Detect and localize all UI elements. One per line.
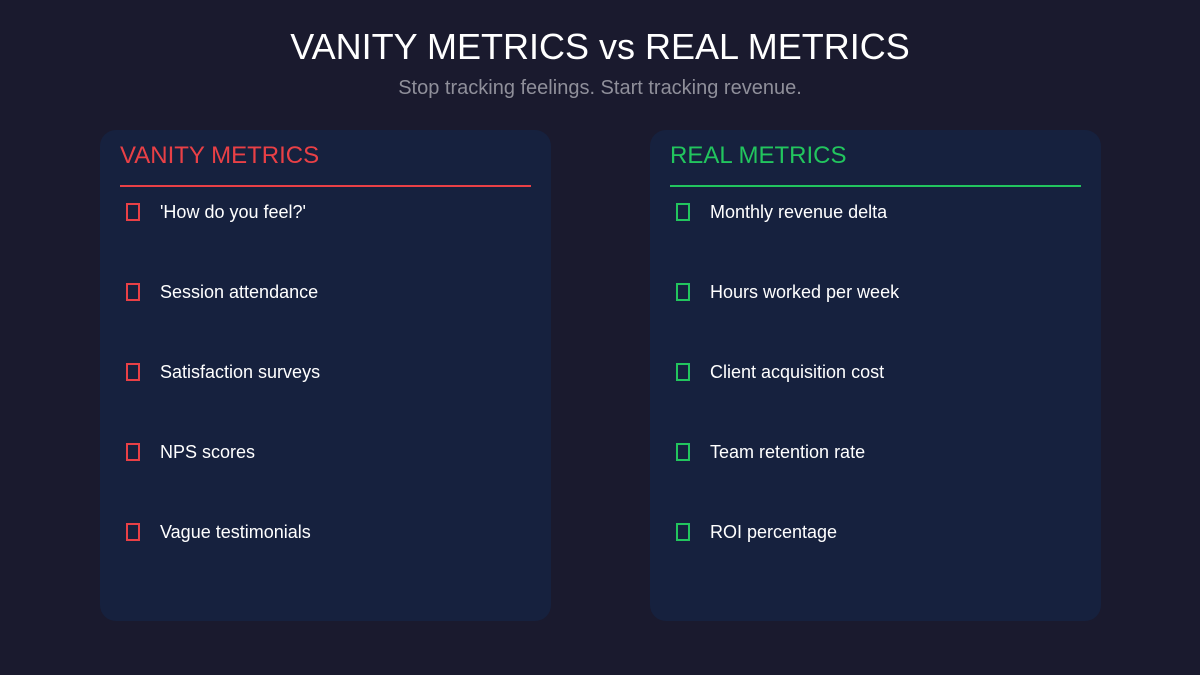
item: client acquisition cost: Client acquisition cost	[710, 362, 884, 382]
title: VANITY METRICS vs REAL METRICS	[290, 26, 910, 67]
item: NPS scores: NPS scores	[160, 442, 255, 462]
heading: vanity: VANITY METRICS	[120, 142, 319, 169]
panel: vanity metrics	[100, 130, 551, 621]
item: hours worked: Hours worked per week	[710, 282, 899, 302]
item: ROI: ROI percentage	[710, 522, 837, 542]
item: team retention: Team retention rate	[710, 442, 865, 462]
subtitle: Stop tracking feelings. Start tracking revenue.	[398, 77, 802, 99]
item: vague testimonials: Vague testimonials	[160, 522, 311, 542]
item: satisfaction surveys: Satisfaction surveys	[160, 362, 320, 382]
panel: real metrics	[650, 130, 1101, 621]
item: session attendance: Session attendance	[160, 282, 318, 302]
item: monthly revenue delta: Monthly revenue delta	[710, 202, 887, 222]
heading: real: REAL METRICS	[670, 142, 846, 169]
item: how do you feel: 'How do you feel?'	[160, 202, 306, 222]
